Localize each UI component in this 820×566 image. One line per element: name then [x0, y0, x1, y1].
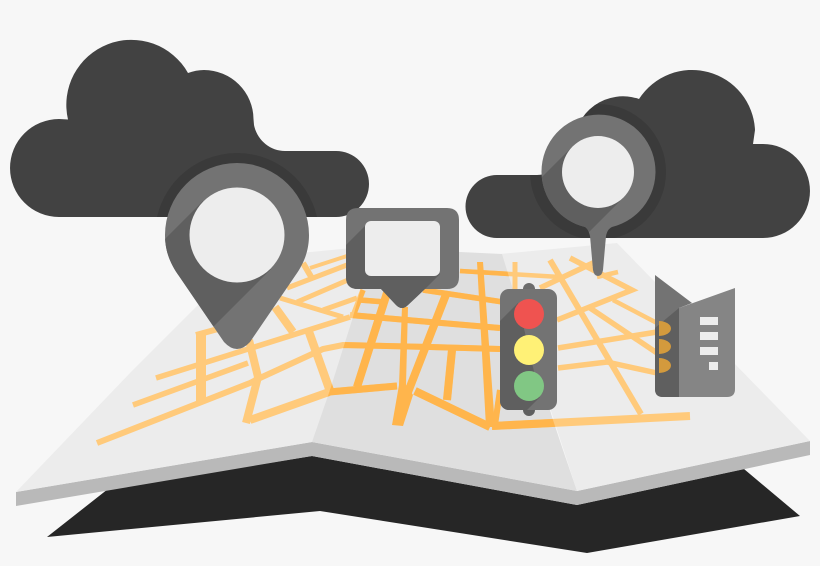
building side awnings: [659, 321, 671, 373]
road network: [97, 256, 690, 443]
green light: [514, 371, 544, 401]
icon: large location pin: [165, 163, 309, 349]
map right panel: [500, 243, 810, 491]
map edge thickness: [16, 441, 810, 506]
icon: message bubble pin: [346, 208, 459, 308]
ground shadow: [47, 456, 800, 553]
red light: [514, 299, 544, 329]
left cloud: [10, 40, 369, 217]
icon: round pin over right cloud: [542, 114, 656, 276]
map middle panel: [312, 248, 577, 491]
right cloud: [466, 70, 810, 240]
icon: traffic light: [500, 283, 557, 416]
yellow light: [514, 335, 544, 365]
map left panel: [16, 246, 372, 492]
building windows: [700, 317, 718, 370]
icon: building: [655, 275, 735, 397]
